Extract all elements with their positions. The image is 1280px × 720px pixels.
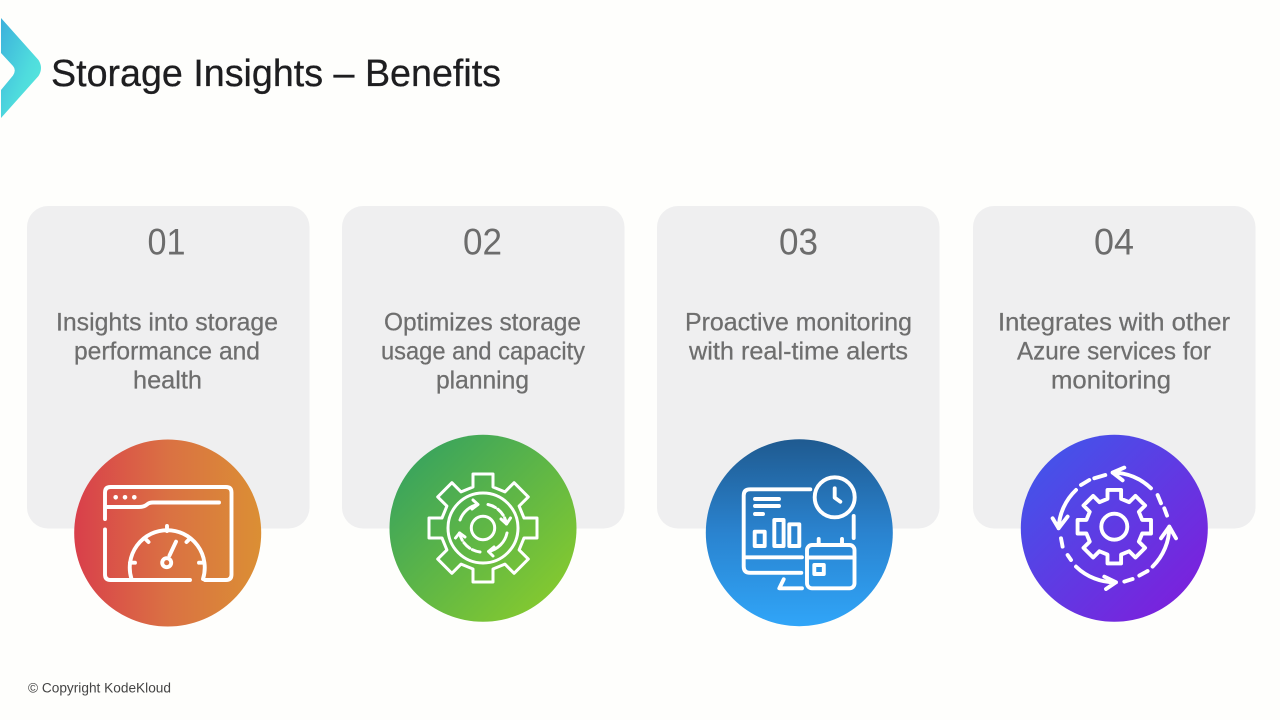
card background (27, 206, 310, 528)
text: proactive monitoring: Proactive monitoring (685, 308, 912, 336)
card background (973, 206, 1256, 528)
number 01: 01 (148, 221, 186, 262)
panel: card 02 (342, 206, 624, 622)
number 03: 03 (779, 221, 818, 262)
logo chevron (1, 18, 41, 118)
icon badge: gear with circular arrows (1021, 435, 1208, 622)
text: insights into storage (56, 308, 278, 394)
panel: card 01 (27, 206, 310, 626)
copyright footer: © Copyright KodeKloud (28, 680, 171, 696)
text: optimizes storage: Optimizes storage (384, 308, 581, 336)
text: proactive monitoring (685, 308, 912, 366)
panel: card 03 (657, 206, 940, 626)
title: Storage Insights – Benefits (51, 53, 501, 95)
text: insights into storage: performance and (74, 338, 260, 366)
text: optimizes storage: usage and capacity (381, 338, 585, 366)
text: optimizes storage: planning (436, 366, 529, 394)
number 02: 02 (463, 221, 502, 262)
text: integrates with other azure services (998, 308, 1230, 394)
text: integrates with other azure services: Azure services for (1017, 338, 1211, 366)
icon badge: monitor, clock and calendar (706, 439, 893, 626)
text: proactive monitoring: with real-time alerts (688, 338, 908, 366)
text: integrates with other azure services: Integrates with other (998, 308, 1230, 336)
card background (657, 206, 940, 528)
card background (342, 206, 624, 528)
text: insights into storage: health (133, 366, 202, 394)
text: insights into storage: Insights into storage (56, 308, 278, 336)
text: optimizes storage (381, 308, 585, 394)
text: integrates with other azure services: monitoring (1051, 366, 1171, 394)
icon badge: browser speedometer (74, 440, 261, 626)
icon badge: gear with cycle arrows (390, 435, 576, 622)
number 04: 04 (1094, 221, 1134, 262)
panel: card 04 (973, 206, 1256, 622)
